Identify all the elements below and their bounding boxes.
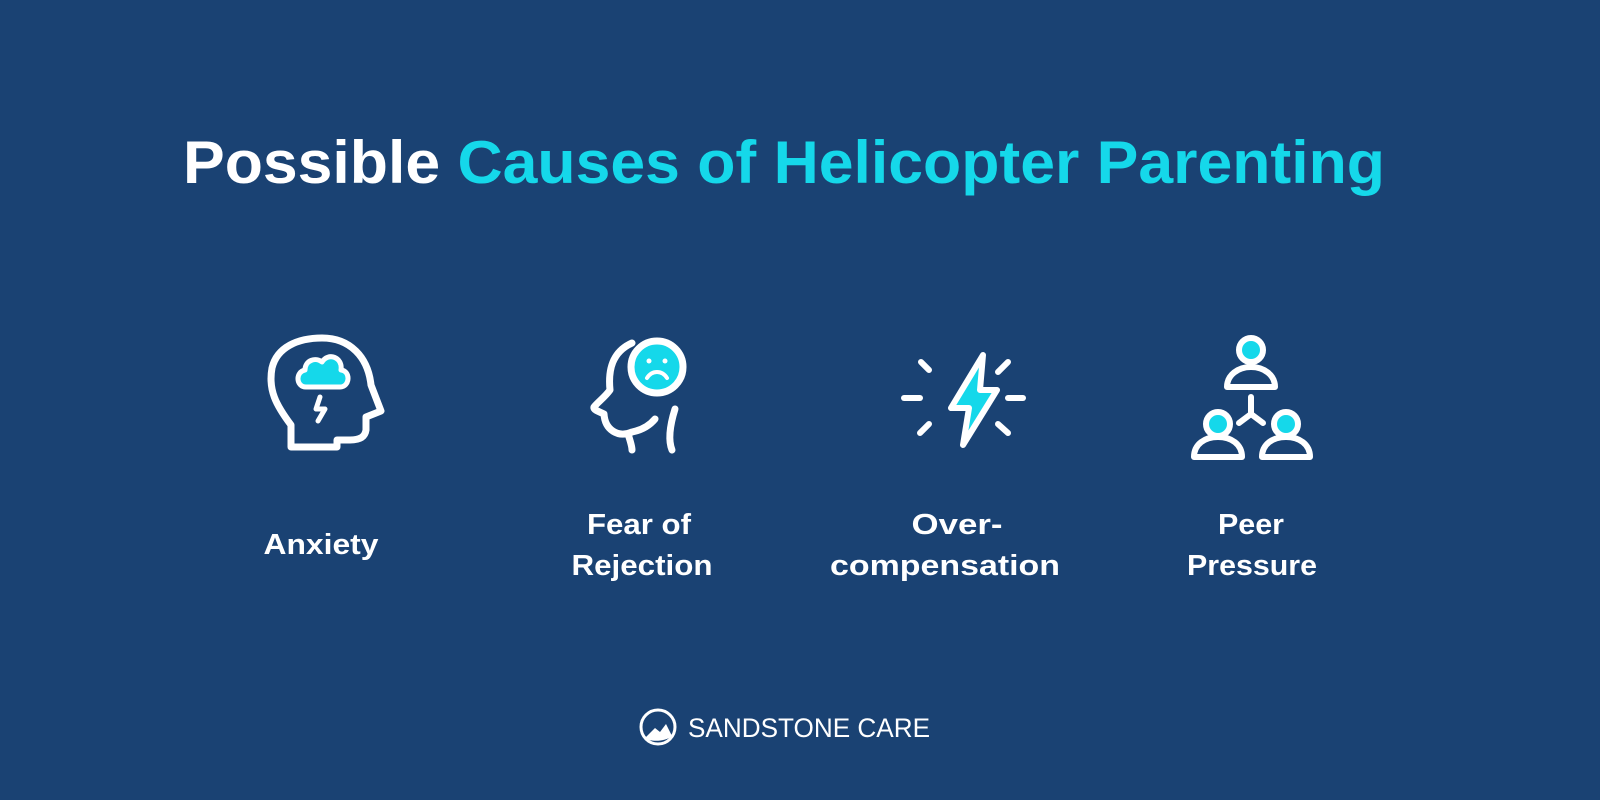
label: overcompensation (830, 509, 1060, 582)
label: overcompensation: compensation (830, 550, 1060, 582)
label: fear of rejection (572, 509, 712, 582)
logo: sandstone care: SANDSTONE CARE (688, 713, 930, 743)
title: Possible Causes of Helicopter Parenting (183, 129, 1385, 196)
icon: face with sad emoji (594, 341, 683, 450)
icon: lightning bolt (904, 355, 1023, 445)
label: fear of rejection: Fear of (587, 509, 691, 541)
label: peer pressure: Pressure (1187, 550, 1317, 582)
icon: peer group (1194, 338, 1310, 457)
icon: head with storm cloud (271, 338, 381, 447)
label: fear of rejection: Rejection (572, 550, 712, 582)
label: anxiety: Anxiety (264, 529, 378, 561)
label: peer pressure: Peer (1218, 509, 1284, 541)
label: peer pressure (1187, 509, 1317, 582)
label: overcompensation: Over- (912, 509, 1002, 541)
